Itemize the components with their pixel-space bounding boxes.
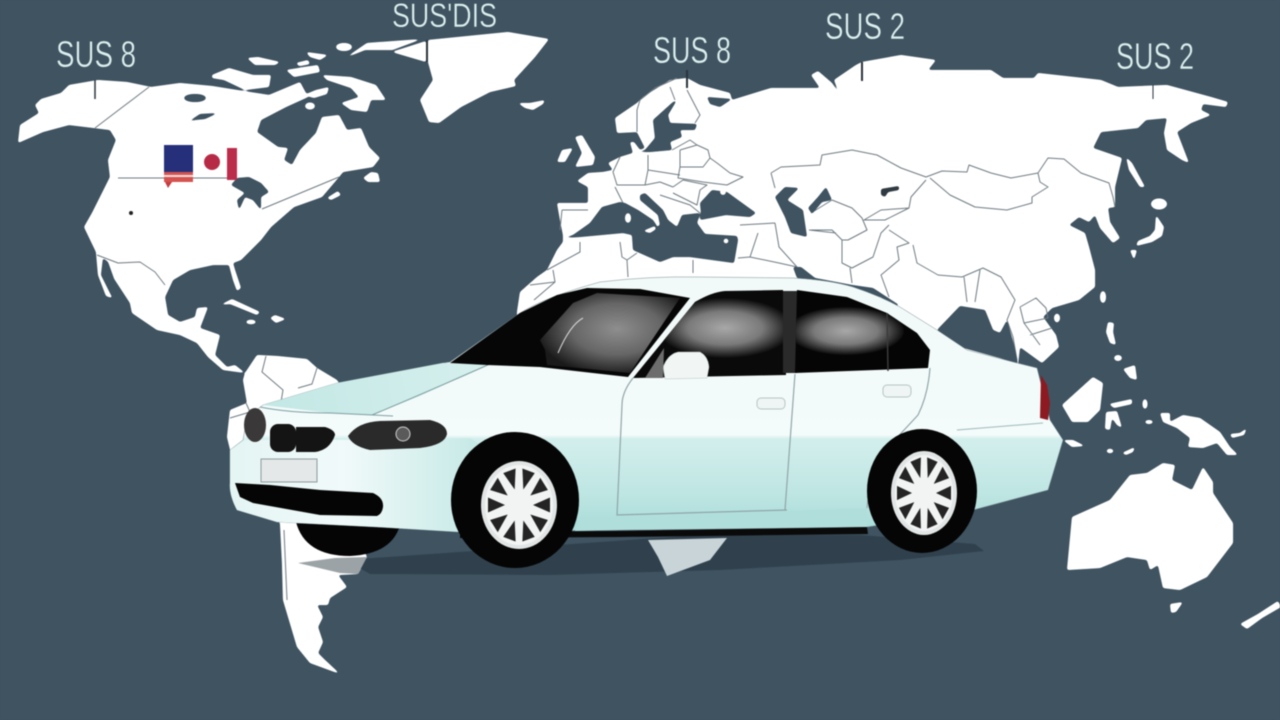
hood [263,363,490,415]
baffin island [322,75,386,112]
sardinia [625,213,631,223]
new zealand [1240,601,1280,629]
persian gulf [793,267,899,308]
britain [575,135,595,167]
far headlight [244,408,266,442]
islands in inland seas [625,189,728,244]
country borders asia [693,150,1115,360]
car body [230,277,1063,532]
kyushu [1130,250,1137,260]
country borders [95,78,1115,600]
black sea [700,190,756,220]
ellesmere east [392,41,426,62]
borders north america [95,87,339,285]
new guinea [1160,413,1238,455]
visayas [1114,355,1122,361]
moluccas [1142,399,1148,409]
bay of bengal [937,306,1018,364]
seas and lakes [101,94,1018,364]
sulawesi [1109,399,1132,408]
door pillar [783,291,797,373]
shadow tip over south america [298,557,367,574]
label: alaska: SUS 8 [56,34,136,75]
rear door window [795,290,930,373]
license plate [261,459,317,482]
eurasia and africa [517,55,1228,400]
borneo [1062,377,1103,422]
main headlight [348,420,447,450]
azov [720,189,726,195]
ireland [557,148,573,162]
windshield [450,288,690,377]
honshu [1136,215,1164,246]
flag: canada [204,148,237,180]
headlight lens [396,427,410,441]
rear panel line [957,423,1043,430]
hainan [1054,314,1060,322]
baja gulf [101,258,118,299]
windshield reflection [540,293,680,373]
taiwan [1100,291,1106,303]
timor [1122,447,1135,455]
sill [575,508,867,531]
rear window reflection [788,307,904,355]
car [230,277,1063,568]
great lakes [231,177,269,210]
rear wheel [867,429,977,553]
australia [1067,463,1233,590]
lake balkhash [881,186,899,197]
africa in shadow [648,538,727,576]
luzon [1106,322,1116,345]
flag: usa [164,145,193,188]
north america [18,80,380,373]
door seams [617,368,930,515]
coats island [305,102,315,110]
label: europe: SUS 8 [653,30,731,71]
rear window divider [887,313,888,371]
alaska tick [94,80,96,99]
hood lines [260,364,490,416]
tasmania [1170,602,1183,613]
hispaniola [270,315,286,323]
iceland [518,100,545,110]
country borders europe [530,78,743,300]
southampton island [304,87,329,98]
canadian lake slave [188,113,218,122]
seram [1145,420,1153,424]
front door window [633,290,786,378]
location dot [129,211,133,215]
caspian sea [775,187,807,237]
newfoundland [363,172,380,182]
underbody [460,527,868,538]
victoria island [212,68,271,90]
grille right [296,427,335,452]
label: east asia: SUS 2 [1116,36,1194,77]
banks island [247,57,280,65]
label: russia: SUS 2 [825,6,905,47]
greenland [420,32,549,123]
white sea [707,97,732,107]
mediterranean sea [563,193,738,263]
devon island [336,43,352,51]
mirror mount [645,348,664,378]
sakhalin [1126,157,1145,187]
lower intake [235,483,383,516]
front window reflection [664,299,784,357]
cyprus [724,238,728,244]
new britain [1230,428,1247,438]
side mirror [663,352,709,379]
south america [227,355,367,674]
ellesmere island [345,39,422,58]
arctic island small [296,60,310,66]
grille left [270,424,296,452]
windshield streak [558,318,583,353]
hokkaido [1151,198,1167,210]
cuba [220,299,260,315]
jamaica [246,320,256,324]
small island [1106,449,1114,453]
java [1063,440,1085,447]
value labels [56,0,1194,77]
sulawesi south [1105,411,1122,430]
aral sea [808,187,832,214]
car ground shadow [345,535,984,575]
far front tyre [296,522,400,556]
sicily [643,226,656,233]
door handle front [757,398,785,409]
borders south america [230,356,317,600]
tail light [1040,375,1050,420]
nova scotia [327,191,341,200]
baltic sea [636,100,697,152]
label ticks [427,40,1153,99]
arctic island north [306,52,328,60]
front bumper [230,438,520,532]
arctic island [286,65,320,77]
canadian lake [184,94,206,102]
mindanao [1123,365,1137,380]
front wheel [451,432,579,568]
door handle rear [883,385,911,397]
